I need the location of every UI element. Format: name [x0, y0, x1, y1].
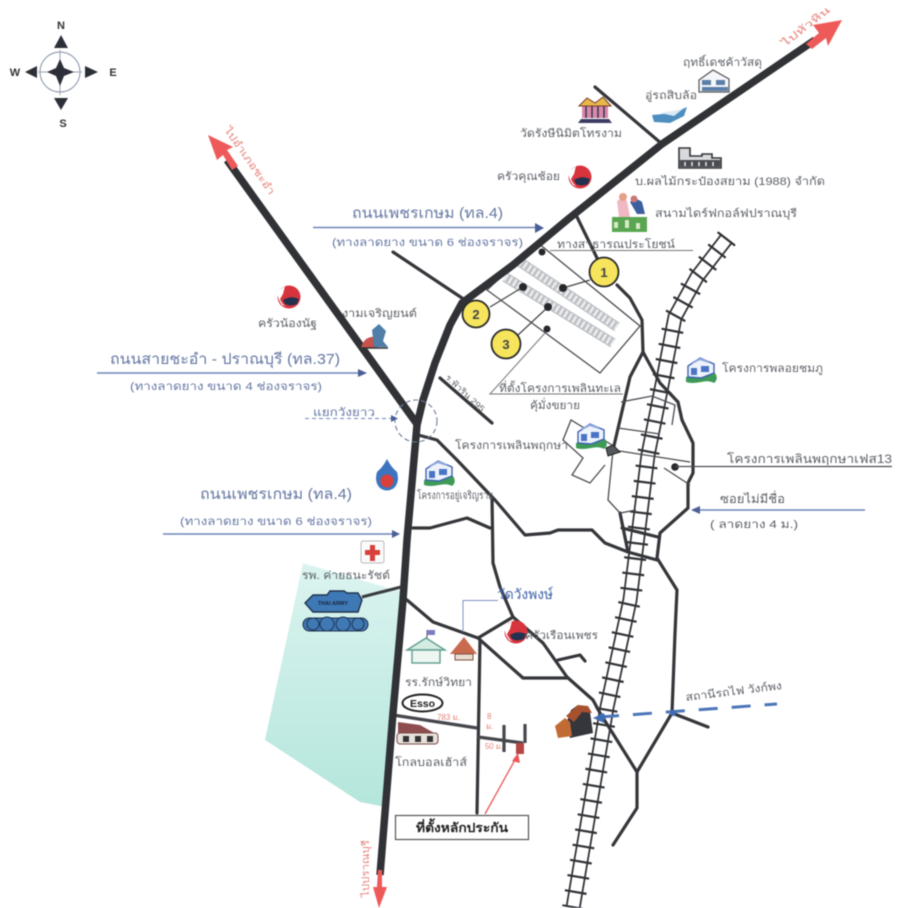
icon: shed [652, 107, 687, 123]
tank: Thai Army: THAI ARMY [318, 601, 349, 607]
tank: Thai Army [303, 587, 401, 631]
hospital: รพ. ค่ายธนะรัชต์ [302, 569, 390, 582]
Wat Wang Phong: วัดวังพงษ์ [497, 586, 553, 602]
golf driving range [612, 193, 797, 232]
marker 3: 3 [502, 337, 510, 352]
direction: to Cha-am: ไปอำเภอชะอำ [221, 124, 277, 197]
project callout: ที่ตั้งโครงการเพลินทะเล [499, 380, 621, 395]
motorcycle shop [342, 307, 417, 348]
distance labels: 50 ม. [485, 742, 503, 751]
marker 2 [462, 300, 490, 328]
Global House: โกลบอลเฮ้าส์ [395, 755, 467, 769]
unnamed soi [691, 490, 865, 531]
distance labels: 8 [487, 712, 492, 721]
project callout [490, 333, 623, 412]
collateral location: ที่ตั้งหลักประกัน [416, 818, 509, 835]
restaurant: Nong Nat [258, 286, 317, 330]
label: Phetkasem top [313, 205, 544, 249]
arrow: to Pranburi [373, 870, 387, 908]
railway [573, 238, 727, 908]
marker 1 [590, 258, 618, 286]
distance labels: 783 ม. [437, 713, 460, 722]
icon: house [424, 461, 455, 486]
project: village [417, 461, 493, 502]
icon: motorcycle [360, 324, 388, 348]
Esso logo [402, 694, 442, 712]
label: Phetkasem top: ถนนเพชรเกษม (ทล.4) [352, 205, 503, 222]
label: Phetkasem lower: ถนนเพชรเกษม (ทล.4) [200, 486, 352, 503]
arrow to site [485, 753, 520, 814]
direction: to Hua Hin: ไปหัวหิน [778, 4, 833, 50]
public way label: ทางสาธารณประโยชน์ [557, 237, 676, 251]
label: Phetkasem lower [163, 486, 400, 538]
direction: to Pranburi: ไปปราณบุรี [360, 839, 372, 898]
Global House [395, 722, 467, 769]
icon: store [397, 722, 438, 744]
icon: chef [504, 620, 528, 644]
restaurant: Ruean Phet [504, 620, 598, 644]
truck garage [645, 90, 697, 123]
project: Ploen Pruksa: โครงการเพลินพฤกษา [455, 438, 568, 452]
label: Phetkasem top: (ทางลาดยาง ขนาด 6 ช่องจราจร) [332, 237, 523, 249]
label: Wang Yao junction [305, 407, 398, 422]
restaurant: Khun Choi: ครัวคุณช้อย [497, 171, 560, 183]
unnamed soi: ซอยไม่มีชื่อ [720, 490, 785, 506]
compass [10, 20, 117, 130]
plot markers [462, 248, 618, 358]
junction circle [395, 400, 437, 442]
marker 3 [492, 330, 520, 358]
factory: บ.ผลไม้กระป๋องสยาม (1988) จำกัด [635, 175, 825, 188]
restaurant: Khun Choi [497, 166, 592, 188]
school [405, 630, 472, 689]
truck garage: อู่รถสิบล้อ [645, 90, 697, 102]
project: Ploen Pruksa phase 13: โครงการเพลินพฤกษาเฟส13 [727, 452, 892, 466]
icon: PTT flame [376, 459, 398, 490]
icon: house [686, 358, 717, 383]
label: Cha-am Pranburi road [97, 351, 367, 393]
train station [555, 679, 783, 738]
restaurant: Nong Nat: ครัวน้องนัฐ [258, 318, 317, 330]
hardware store [683, 54, 762, 92]
compass: E [109, 67, 117, 79]
marker 2: 2 [472, 307, 480, 322]
factory [635, 148, 825, 188]
icon: chef [568, 166, 592, 188]
hardware store: ฤทธิ์เดชค้าวัสดุ [683, 54, 762, 69]
Esso logo: Esso [410, 698, 435, 710]
project: Ploy Chomphu: โครงการพลอยชมภู [722, 361, 823, 375]
icon: station [555, 705, 593, 738]
project callout: คุ้มั่งขยาย [530, 397, 580, 412]
icon: red cross [361, 541, 384, 563]
compass: N [57, 20, 65, 32]
restaurant: Ruean Phet: ครัวเรือนเพชร [525, 629, 598, 642]
label: Wang Yao junction: แยกวังยาว [313, 407, 375, 419]
icon: store [699, 70, 729, 92]
icon: school [407, 630, 445, 663]
hatched lots [505, 262, 617, 343]
project plot [487, 243, 640, 373]
temple: วัดรังษีนิมิตโทรงาม [520, 126, 622, 140]
collateral location [396, 743, 528, 840]
hospital [302, 541, 390, 582]
road 295 label: ร.ฟ้าริน 295 [444, 373, 487, 414]
distance labels [437, 712, 503, 751]
marker 1: 1 [600, 265, 608, 280]
arrow: to Hua Hin [806, 20, 842, 49]
label: Phetkasem lower: (ทางลาดยาง ขนาด 6 ช่องจราจร) [180, 516, 372, 528]
icon: chef [277, 286, 300, 308]
golf driving range: สนามไดร์ฟกอล์ฟปราณบุรี [655, 207, 797, 220]
compass: S [59, 118, 67, 130]
train station: สถานีรถไฟ วังก์พง [685, 679, 783, 704]
project: village: โครงการอยู่เจริญราย [417, 488, 493, 502]
motorcycle shop: งามเจริญยนต์ [342, 307, 417, 320]
label: Cha-am Pranburi road: (ทางลาดยาง ขนาด 4 ช่องจราจร) [130, 381, 322, 393]
arrow: to Cha-am [208, 135, 238, 170]
Wat Wang Phong [450, 586, 553, 660]
dashed pointer [593, 704, 777, 723]
project: Ploen Pruksa [455, 424, 607, 452]
school: รร.รักษ์วิทยา [405, 676, 472, 689]
icon: factory [679, 148, 721, 168]
compass: W [10, 67, 21, 79]
icon: temple [578, 97, 612, 123]
local roads [393, 87, 708, 845]
icon: house [576, 424, 607, 449]
project: Ploy Chomphu [686, 358, 823, 383]
icon: temple roof [450, 637, 477, 660]
distance labels: ม. [486, 722, 494, 731]
icon: golfers [612, 193, 647, 232]
teal area [265, 563, 402, 807]
temple [520, 97, 622, 140]
project: Ploen Pruksa phase 13 [671, 452, 892, 471]
main road: Phetkasem south and north-east [380, 40, 815, 875]
main road: Cha-am Pranburi [227, 160, 417, 424]
label: Cha-am Pranburi road: ถนนสายชะอำ - ปราณบุรี (ทล.37) [110, 351, 340, 369]
unnamed soi: ( ลาดยาง 4 ม.) [710, 519, 798, 531]
